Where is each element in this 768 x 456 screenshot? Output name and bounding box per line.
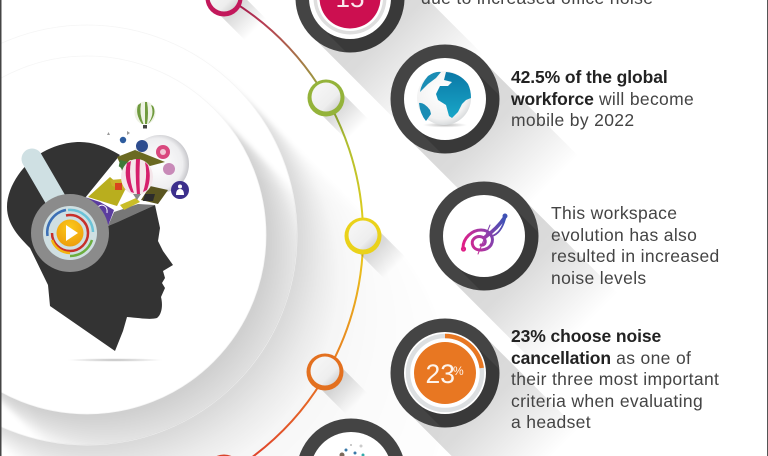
left edge line [0, 0, 2, 456]
text: mobile workforce [511, 67, 694, 130]
badge: 23 percent: % [453, 364, 464, 378]
right edge line [767, 0, 768, 456]
panel: concentric white circles with shadows [2, 25, 345, 456]
head silhouette [7, 142, 173, 351]
icon: globe [417, 71, 471, 128]
badge: 23 percent: 23 [426, 359, 455, 389]
text: noise cancellation [511, 326, 719, 432]
idea burst [85, 102, 189, 226]
text: noise cancellation: criteria when evaluating [511, 390, 703, 410]
text: mobile workforce: workforce will become [511, 88, 694, 108]
text: noise cancellation: cancellation as one of [511, 348, 691, 368]
icon: treble clef [462, 214, 506, 254]
text: noise cancellation: their three most important [511, 369, 719, 389]
text: noise cancellation: a headset [511, 412, 591, 432]
long shadows behind badges [312, 0, 618, 456]
text: workspace evolution: noise levels [551, 268, 647, 288]
badge: 23 percent [390, 318, 500, 428]
text: workspace evolution: evolution has also [551, 224, 697, 244]
text: mobile workforce: mobile by 2022 [511, 110, 634, 130]
badge: bottom [296, 418, 406, 456]
text: workspace evolution: This workspace [551, 203, 677, 223]
badge: globe [390, 44, 500, 154]
illustration: head with headphones [7, 102, 189, 362]
icon: striped balloon [134, 102, 156, 128]
text: noise cancellation: 23% choose noise [511, 326, 661, 346]
text: workspace evolution [551, 203, 720, 288]
badge: 15 crimson [296, 0, 404, 52]
timeline arc [227, 0, 363, 456]
floor shadow [67, 358, 163, 362]
node: crimson [206, 0, 266, 40]
node: green [308, 80, 368, 140]
headphones [31, 159, 109, 272]
badge: treble clef [430, 182, 538, 290]
node: yellow [344, 218, 405, 278]
node: red [206, 454, 242, 456]
node: orange [306, 354, 367, 414]
text: workspace evolution: resulted in increased [551, 246, 720, 266]
text: mobile workforce: 42.5% of the global [511, 67, 668, 87]
